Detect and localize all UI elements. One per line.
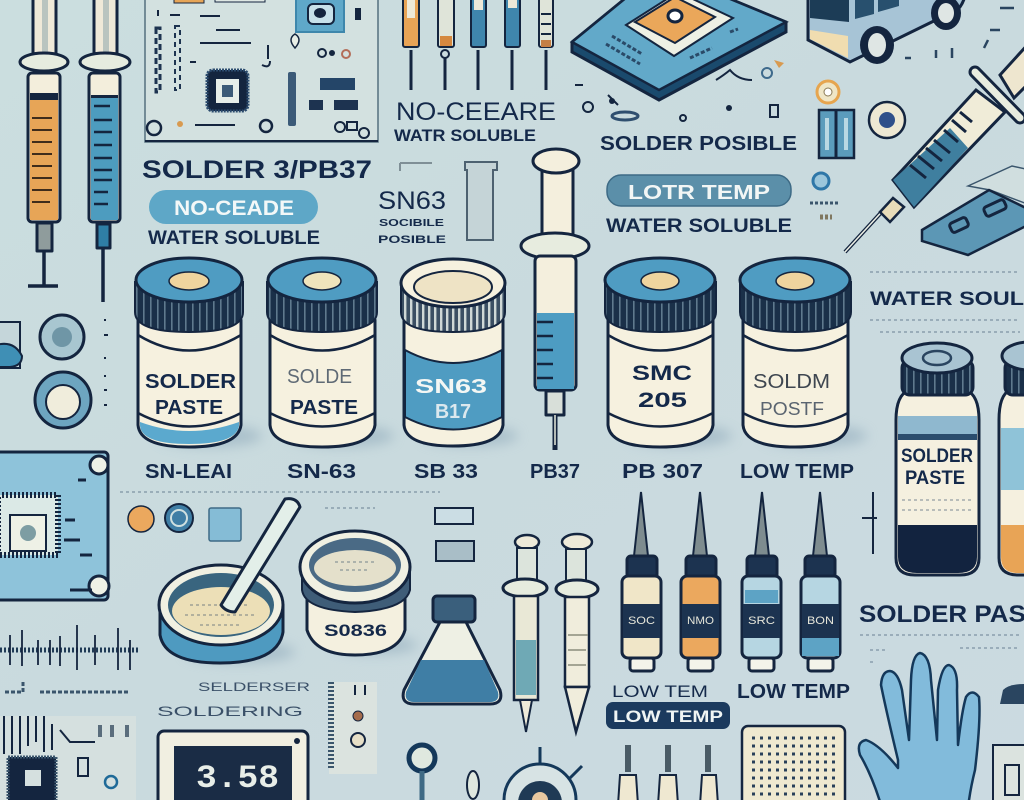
small component panel	[329, 682, 377, 774]
label: SOLDERING: SELDERSER	[198, 680, 310, 694]
dropper bottle 1	[622, 492, 661, 671]
perforated board	[742, 726, 845, 800]
pill: NO-CEADE: NO-CEADE	[174, 197, 294, 220]
label: WATER SOLUBLE right: WATER SOLUBLE	[606, 216, 792, 237]
jar caption: PB37: PB37	[530, 461, 580, 483]
scattered details around chip plate	[575, 8, 1014, 121]
left side small icons	[0, 315, 108, 428]
lower left circuit	[0, 716, 136, 800]
blue circuit board left	[0, 452, 109, 600]
dropper bottle 4	[801, 492, 840, 671]
label: SN63: SN63	[378, 187, 446, 215]
small icons upper right	[810, 81, 905, 217]
digital display: 3.58	[196, 760, 279, 797]
jar: SMC 205: SMC	[632, 362, 692, 385]
row of small syringes top	[403, 0, 553, 90]
dropper bottle 1: SOC	[628, 615, 655, 627]
jar: SOLDER PASTE	[135, 258, 262, 447]
jar: SN63 B17	[401, 259, 518, 446]
heading: SOLDER 3/PB37: SOLDER 3/PB37	[142, 156, 372, 184]
jar: SOLDE PASTE: PASTE	[290, 397, 358, 419]
bottle: right edge	[999, 342, 1024, 575]
jar: SOLDER PASTE: PASTE	[155, 397, 223, 419]
pill: NO-CEADE	[149, 190, 318, 224]
jar: SN63 B17: B17	[435, 401, 471, 423]
pill: LOTR TEMP	[607, 175, 791, 206]
small icon beside SN63	[400, 162, 497, 240]
pill: LOTR TEMP: LOTR TEMP	[628, 182, 770, 204]
pill: LOW TEMP	[606, 702, 730, 729]
bottle: SOLDER PASTE: SOLDER	[901, 446, 973, 467]
label: WATER SOLUBLE: WATER SOLUBLE	[148, 228, 320, 249]
bus	[808, 0, 965, 64]
jar: SOLDER PASTE: SOLDER	[145, 371, 237, 393]
jar: SOLDM POSTF	[740, 258, 867, 447]
waveform	[0, 625, 140, 692]
digital display	[158, 731, 308, 800]
flask	[403, 596, 501, 704]
jar: SN63 B17: SN63	[415, 376, 487, 398]
glove	[859, 653, 980, 800]
label: SOCIBLE POSIBLE: SOCIBILE	[379, 218, 444, 229]
label: LOW TEMP bold: LOW TEMP	[737, 681, 850, 703]
jar: SOLDM POSTF: SOLDM	[753, 371, 830, 393]
bottle: SOLDER PASTE	[896, 343, 979, 575]
label: SOLDER POSIBLE: SOLDER POSIBLE	[600, 133, 797, 155]
jar caption: SB 33: SB 33	[414, 461, 478, 483]
dropper bottle 3: SRC	[748, 615, 775, 627]
label: WATR SOLUBLE: WATR SOLUBLE	[394, 126, 536, 145]
jar caption: SN-LEAI: SN-LEAI	[145, 461, 232, 483]
jar: SMC 205	[605, 258, 732, 447]
fine print under heading	[860, 635, 1020, 662]
jar: SOLDE PASTE: SOLDE	[287, 366, 352, 388]
syringe: blue top left	[80, 0, 130, 302]
jar: SOLDM POSTF: POSTF	[760, 399, 824, 419]
label: WATER SOUL: WATER SOUL	[870, 289, 1024, 310]
circuit board top	[145, 0, 378, 142]
fine print lines	[870, 272, 1020, 332]
bowl with paste and spoon	[159, 499, 300, 663]
small blue tag	[922, 166, 1024, 255]
label: LOW TEM: LOW TEM	[612, 682, 708, 701]
dropper bottle 2	[681, 492, 720, 671]
twin syringes lower	[503, 534, 598, 732]
gauge partial	[504, 747, 582, 800]
label: SOCIBLE POSIBLE	[378, 218, 446, 246]
open jar: S0836	[300, 531, 417, 655]
bottle: SOLDER PASTE: PASTE	[905, 468, 965, 489]
dropper bottle 2: NMO	[687, 615, 714, 627]
small icons over bowl	[120, 492, 474, 561]
dropper bottle 4: BON	[807, 615, 834, 627]
syringe: orange top left	[20, 0, 68, 286]
right edge icons	[862, 492, 1024, 800]
dropper bottle 3	[742, 492, 781, 671]
jar: SMC 205: 205	[638, 389, 687, 412]
heading: NO-CEEARE: NO-CEEARE	[396, 98, 556, 126]
magnifier tool	[409, 745, 479, 800]
open jar: S0836: S0836	[324, 621, 387, 640]
label: SOLDERING	[157, 680, 310, 719]
label: SOLDERING: SOLDERING	[157, 703, 303, 719]
chip on blue plate	[572, 0, 786, 100]
central syringe	[521, 149, 589, 450]
jar caption: LOW TEMP: LOW TEMP	[740, 461, 854, 483]
jar caption: SN-63: SN-63	[287, 461, 356, 483]
label: SOCIBLE POSIBLE: POSIBLE	[378, 234, 446, 246]
small syringes bottom	[618, 745, 718, 800]
jar caption: PB 307: PB 307	[622, 461, 703, 483]
jar: SOLDE PASTE	[267, 258, 394, 447]
diagonal syringe	[845, 42, 1024, 252]
pill: LOW TEMP: LOW TEMP	[613, 707, 723, 726]
